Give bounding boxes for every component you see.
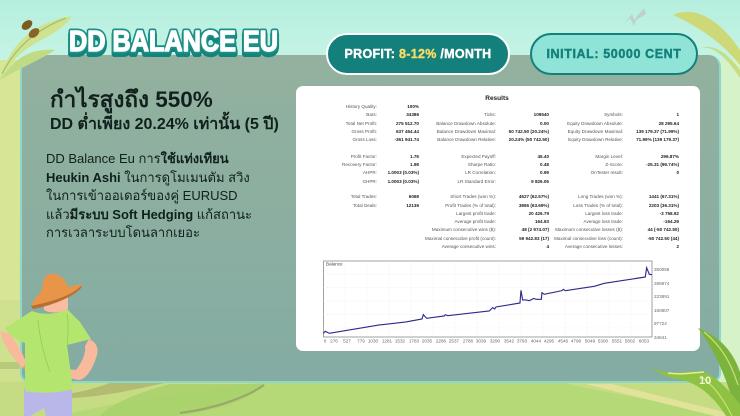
table: results statistics: 34386 (406, 112, 419, 117)
title: DD BALANCE EU (69, 26, 278, 58)
chart: balance curve: 34641 (654, 335, 667, 340)
chart: balance curve: 350058 (654, 267, 670, 272)
icon: rice stalk top left (0, 16, 72, 80)
table: results statistics: 48 (2 974.07) (522, 227, 549, 232)
table: results statistics: Results (485, 95, 509, 102)
table: results statistics: -25.31 (99.74%) (646, 162, 679, 167)
chart: balance curve: 1030 (368, 338, 379, 344)
page number: 10 (699, 375, 711, 387)
table: results statistics: 2203 (36.31%) (649, 203, 679, 208)
table: results statistics: 164.93 (535, 219, 549, 224)
table: results statistics: Recovery Factor: (342, 162, 377, 167)
table: results statistics: 1.98 (410, 162, 419, 167)
table: results statistics: Profit Trades (% of total): (445, 203, 496, 208)
table: results statistics: 1 (676, 112, 679, 117)
chart: balance curve: 3039 (476, 338, 487, 344)
chart: balance curve: 2286 (436, 338, 447, 344)
title: DD BALANCE EU (69, 29, 278, 61)
table: results statistics: Equity Drawdown Absolute: (567, 121, 623, 126)
chart: balance curve: 527 (343, 338, 351, 344)
table: results statistics: 20 426.79 (529, 211, 549, 216)
table: results statistics: Largest profit trade: (456, 211, 496, 216)
panel: results report card (296, 86, 700, 351)
text block: strategy description (46, 151, 252, 240)
table: results statistics: Expected Payoff: (461, 154, 496, 159)
badge: initial capital: INITIAL: 50000 CENT (546, 47, 682, 61)
table: results statistics: 0 (676, 170, 679, 175)
table: results statistics: Z-Score: (605, 162, 623, 167)
icon: distant birds (624, 8, 646, 26)
table: results statistics: Sharpe Ratio: (468, 162, 496, 167)
table: results statistics: 1441 (67.31%) (649, 194, 679, 199)
table: results statistics: History Quality: (346, 104, 377, 109)
chart: balance curve: 0 (324, 338, 327, 344)
table: results statistics: Symbols: (604, 112, 623, 117)
text block: strategy description: DD Balance Eu การใช้แท่งเทียน (46, 151, 229, 166)
chart: balance curve: 2788 (463, 338, 474, 344)
table: results statistics: OnTester result: (591, 170, 623, 175)
table: results statistics: 2 (676, 244, 679, 249)
badge: profit (326, 33, 510, 75)
chart: balance curve: 3290 (490, 338, 501, 344)
chart: balance curve: 1783 (409, 338, 420, 344)
table: results statistics: Loss Trades (% of total): (573, 203, 623, 208)
table: results statistics: Margin Level: (595, 154, 623, 159)
table: results statistics: -50 742.50 (44) (648, 236, 679, 241)
table: results statistics: Balance Drawdown Relative: (437, 137, 496, 142)
chart: balance curve: 4044 (531, 338, 542, 344)
table: results statistics: 139 179.37 (71.99%) (636, 129, 679, 134)
table: results statistics: 637 454.44 (396, 129, 419, 134)
chart: balance curve: 779 (357, 338, 365, 344)
table: results statistics: Total Net Profit: (346, 121, 377, 126)
chart: balance curve: 5551 (612, 338, 623, 344)
chart: balance curve: 1281 (382, 338, 393, 344)
table: results statistics: 1.0003 (0.03%) (388, 170, 419, 175)
table: results statistics: Average consecutive wins: (442, 244, 496, 249)
table: results statistics: 12136 (406, 203, 419, 208)
table: results statistics: 0.99 (540, 170, 549, 175)
table: results statistics: Long Trades (won %): (578, 194, 623, 199)
table: results statistics: Gross Loss: (352, 137, 377, 142)
table: results statistics: 275 512.70 (396, 121, 419, 126)
table: results statistics: Equity Drawdown Maximal: (568, 129, 623, 134)
table: results statistics: Average loss trade: (584, 219, 623, 224)
table: results statistics: 71.99% (139 179.37) (636, 137, 679, 142)
table: results statistics: Short Trades (won %): (450, 194, 496, 199)
chart: balance curve: 3542 (504, 338, 515, 344)
table: results statistics: 109540 (534, 112, 549, 117)
table: results statistics: 4 (546, 244, 549, 249)
text block: strategy description: Heukin Ashi ในการดูโมเมนตัม สวิง (46, 170, 250, 185)
table: results statistics: Balance Drawdown Absolute: (436, 121, 496, 126)
chart: balance curve: 3793 (517, 338, 528, 344)
chart: balance curve: 2537 (449, 338, 460, 344)
table: results statistics: Balance Drawdown Maximal: (437, 129, 496, 134)
chart: balance curve: Balance (326, 262, 343, 266)
table: results statistics: -361 941.74 (394, 137, 419, 142)
chart: balance curve: 5802 (625, 338, 636, 344)
table: results statistics: -3 758.92 (660, 211, 679, 216)
table: results statistics: 44 (-50 742.50) (648, 227, 679, 232)
chart: balance curve: 4546 (558, 338, 569, 344)
chart: balance curve: 97724 (654, 321, 667, 326)
table: results statistics: Profit Factor: (351, 154, 377, 159)
chart: balance curve: 6053 (639, 338, 650, 344)
table: results statistics: 4627 (62.57%) (519, 194, 549, 199)
table: results statistics: 50 742.50 (20.24%) (509, 129, 549, 134)
table: results statistics: -164.29 (663, 219, 679, 224)
heading: drawdown claim: DD ต่ำเพียง 20.24% เท่านั้น (5 ปี) (50, 116, 279, 133)
table: results statistics: LR Standard Error: (457, 179, 496, 184)
table: results statistics: Bars: (366, 112, 377, 117)
chart: balance curve: 5300 (598, 338, 609, 344)
panel: main content background (20, 55, 721, 383)
chart: balance curve: 4295 (544, 338, 555, 344)
table: results statistics: 59 942.83 (17) (519, 236, 549, 241)
chart: balance curve: 276 (330, 338, 338, 344)
heading: profit claim: กำไรสูงถึง 550% (50, 87, 213, 112)
table: results statistics: Maximum consecutive wins ($): (432, 227, 496, 232)
icon: rice stalk top right (673, 12, 740, 78)
table: results statistics: Ticks: (484, 112, 496, 117)
table: results statistics: 0.00 (540, 121, 549, 126)
chart: balance curve: 2035 (422, 338, 433, 344)
table: results statistics: AHPR: (363, 170, 377, 175)
table: results statistics: 3865 (63.69%) (519, 203, 549, 208)
table: results statistics: 100% (407, 104, 419, 109)
table: results statistics: 0.48 (540, 162, 549, 167)
table: results statistics: 1.0003 (0.03%) (388, 179, 419, 184)
table: results statistics: Gross Profit: (351, 129, 377, 134)
table: results statistics: GHPR: (362, 179, 377, 184)
text block: strategy description: ในการเข้าออเดอร์ของคู่ EURUSD (46, 188, 238, 203)
table: results statistics: Largest loss trade: (585, 211, 623, 216)
table: results statistics: 9 826.05 (531, 179, 549, 184)
text block: strategy description: การเวลาระบบโดนลากเยอะ (46, 225, 200, 240)
table: results statistics: Equity Drawdown Relative: (568, 137, 623, 142)
table: results statistics: 45.40 (538, 154, 549, 159)
table: results statistics: 1.76 (410, 154, 419, 159)
illustration: farmer seen from behind (1, 274, 98, 416)
badge: profit: PROFIT: 8-12% /MONTH (344, 47, 492, 61)
chart: balance curve: 5049 (585, 338, 596, 344)
table: results statistics: 20.24% (50 742.50) (509, 137, 549, 142)
table: results statistics: Total Deals: (353, 203, 377, 208)
chart: balance curve: 1532 (395, 338, 406, 344)
table: results statistics: Maximal consecutive profit (count): (425, 236, 496, 241)
table: results statistics: Total Trades: (351, 194, 377, 199)
badge: initial capital (530, 33, 698, 75)
title: DD BALANCE EU (69, 26, 278, 58)
table: results statistics: Average consecutive losses: (565, 244, 623, 249)
table: results statistics: 296.87% (661, 154, 679, 159)
chart: balance curve: 160807 (654, 308, 670, 313)
table: results statistics: LR Correlation: (465, 170, 496, 175)
table: results statistics: 6068 (409, 194, 419, 199)
chart: balance curve: 286974 (654, 281, 670, 286)
text block: strategy description: แล้วมีระบบ Soft Hedging แก้สถานะ (46, 207, 252, 222)
table: results statistics: Maximum consecutive losses ($): (555, 227, 623, 232)
table: results statistics: 28 295.64 (659, 121, 679, 126)
chart: balance curve: 223891 (654, 294, 670, 299)
table: results statistics: Maximal consecutive loss (count): (554, 236, 623, 241)
table: results statistics: Average profit trade: (454, 219, 496, 224)
chart: balance curve: 4798 (571, 338, 582, 344)
